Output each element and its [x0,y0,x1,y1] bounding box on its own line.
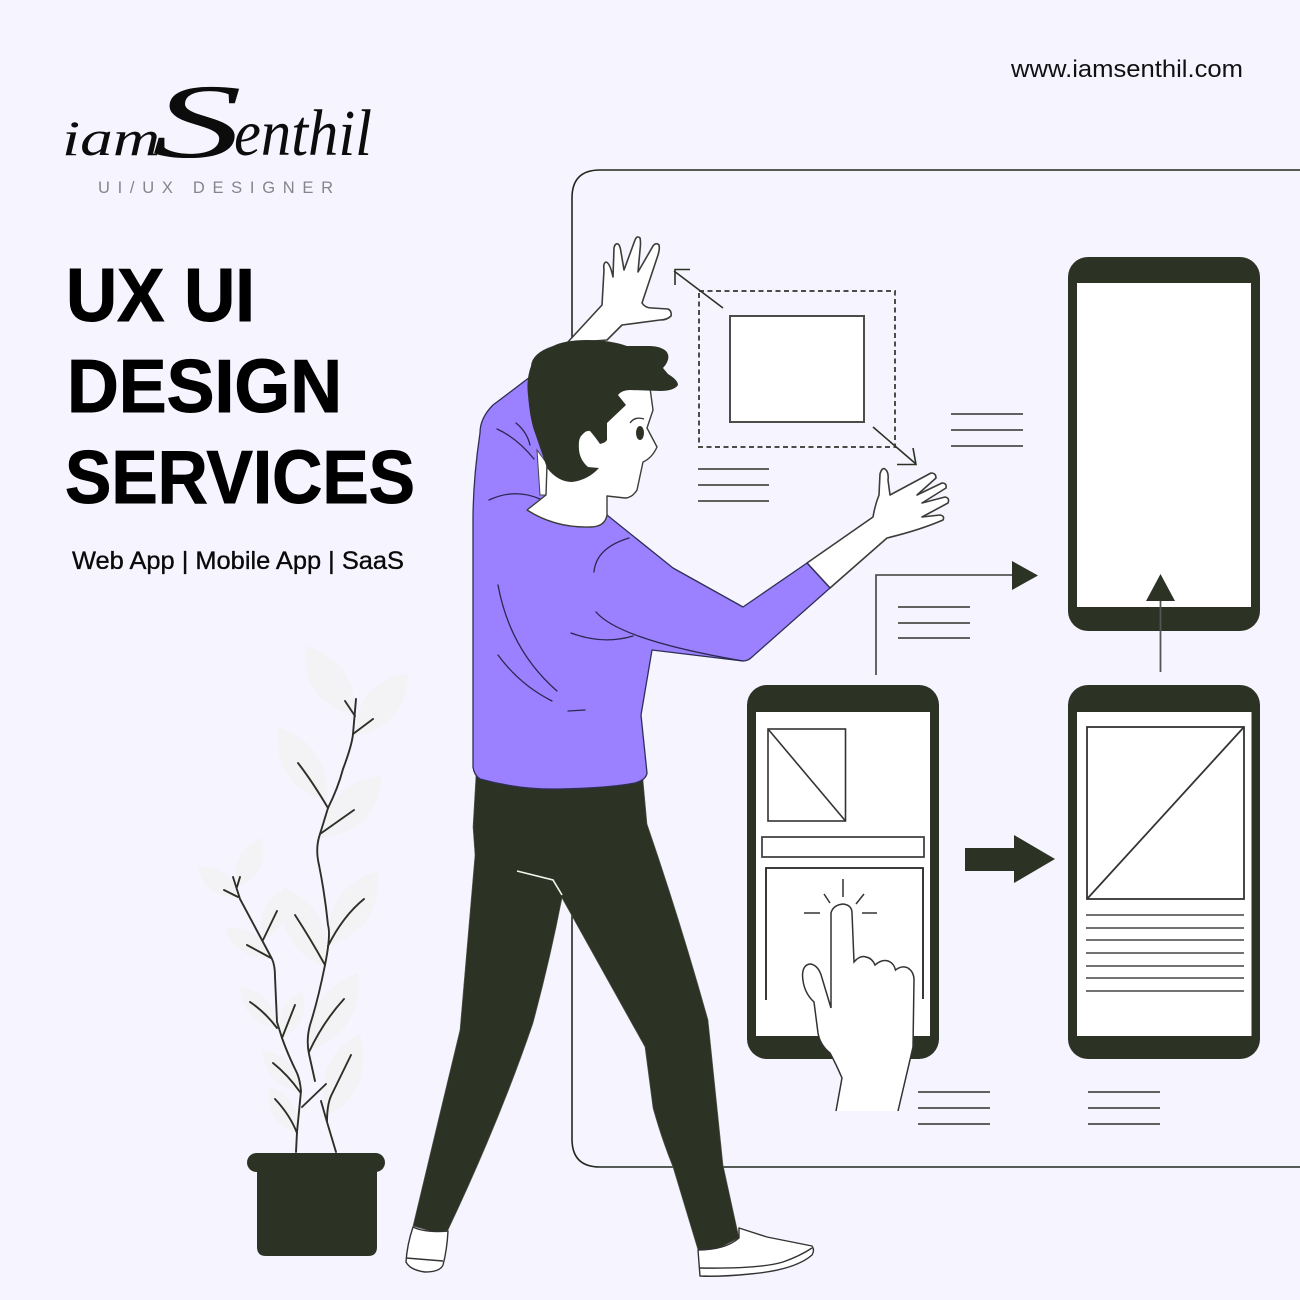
extended hand and forearm [807,469,949,588]
logo signature: S [152,63,242,180]
hand outline [802,904,914,1111]
tapping hand [802,879,914,1111]
sweater [473,377,830,789]
resize arrow bottom-right [873,427,916,464]
title [65,253,415,519]
stems [224,699,373,1152]
image placeholder [1087,727,1244,899]
person [406,237,949,1276]
eyebrow [630,418,644,423]
website url: www.iamsenthil.com [1010,56,1243,83]
logo signature: iam [62,110,160,166]
top phone [1068,257,1260,631]
text lines groups [698,414,1160,1124]
title: UX UI [66,253,255,337]
dashed selection box [699,291,895,447]
tap rays [804,879,877,913]
title: SERVICES [65,435,415,519]
face and neck [527,388,657,527]
hair [527,340,678,482]
right arrow [965,835,1055,883]
selected white rectangle [730,316,864,422]
connector arrow to top phone [876,561,1038,675]
right shoe [698,1228,814,1276]
raised hand [567,237,671,343]
trousers [413,775,739,1250]
sweater folds [489,423,743,711]
content box open bottom [766,868,923,1000]
neck and collar strip [537,450,548,495]
logo signature: enthil [234,97,372,170]
phone left wireframe [747,685,939,1059]
pot [247,1153,385,1256]
up arrow [1146,574,1175,672]
knee highlight [517,871,562,895]
text lines [1086,915,1244,991]
phone right wireframe [1068,685,1260,1059]
leaves [198,646,408,1133]
eye [636,426,644,440]
plant [198,646,408,1256]
input bar [762,837,924,857]
left shoe [406,1227,448,1272]
image placeholder [768,729,846,821]
selection wireframe [674,270,916,464]
subtitle: Web App | Mobile App | SaaS [72,547,404,575]
logo signature [62,63,372,180]
logo [62,63,372,197]
resize arrow top-left [674,270,723,308]
logo tagline: UI/UX DESIGNER [98,179,333,197]
wireframe board frame [572,170,1300,1167]
title: DESIGN [67,344,342,428]
